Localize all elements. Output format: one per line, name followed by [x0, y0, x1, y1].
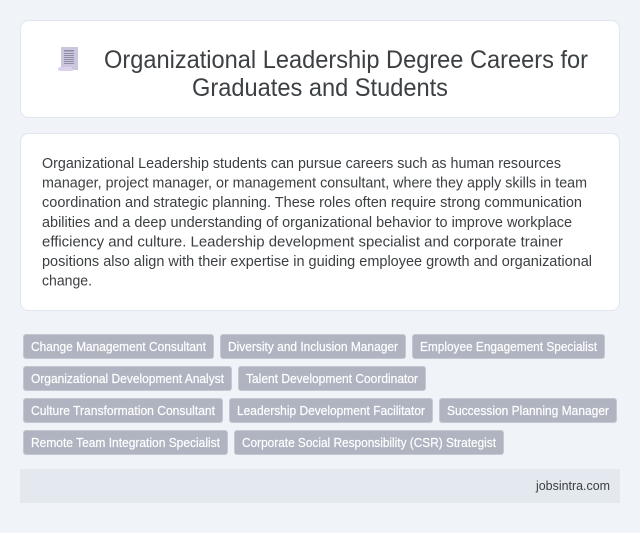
- tag: [238, 366, 426, 390]
- tag: Employee Engagement Specialist: [420, 340, 597, 354]
- heading: Organizational Leadership Degree Careers for: [104, 46, 588, 74]
- footer bar: jobsintra.com: [535, 479, 610, 493]
- icon: document scroll: [58, 47, 78, 71]
- tag: Culture Transformation Consultant: [31, 404, 216, 418]
- heading: [104, 46, 588, 102]
- tag: [24, 430, 228, 454]
- tag: [220, 334, 406, 358]
- tag: [24, 366, 232, 390]
- tag: [412, 334, 604, 358]
- tag: Change Management Consultant: [31, 340, 206, 354]
- panel: description text: positions also align with their expertise in guiding employee growth and organizational: [42, 254, 592, 270]
- panel: description text: efficiency and culture. Leadership development specialist and corporate trainer: [42, 234, 563, 250]
- tag: Leadership Development Facilitator: [237, 404, 425, 418]
- panel: description text: change.: [42, 274, 92, 290]
- tag: Diversity and Inclusion Manager: [228, 340, 398, 354]
- panel: description text: [20, 134, 620, 310]
- tag: [230, 398, 432, 422]
- tag: [440, 398, 616, 422]
- tag list: [24, 334, 616, 454]
- tag: [24, 334, 214, 358]
- tag: Talent Development Coordinator: [246, 372, 418, 386]
- tag: Succession Planning Manager: [447, 404, 609, 418]
- panel: description text: coordination and strategic planning. These roles often require strong communication: [42, 195, 582, 211]
- tag: [234, 430, 504, 454]
- panel: description text: abilities and a deep understanding of organizational behavior to improve workplace: [42, 215, 572, 231]
- tag: Organizational Development Analyst: [31, 372, 224, 386]
- tag: Corporate Social Responsibility (CSR) Strategist: [242, 436, 496, 450]
- tag: [24, 398, 222, 422]
- heading: Graduates and Students: [192, 74, 448, 102]
- panel: description text: Organizational Leadership students can pursue careers such as human resources: [42, 156, 561, 172]
- panel: title card: [20, 20, 620, 118]
- footer bar: [20, 469, 620, 503]
- tag: Remote Team Integration Specialist: [31, 436, 220, 450]
- panel: description text: manager, project manager, or management consultant, where they apply skills in team: [42, 176, 587, 192]
